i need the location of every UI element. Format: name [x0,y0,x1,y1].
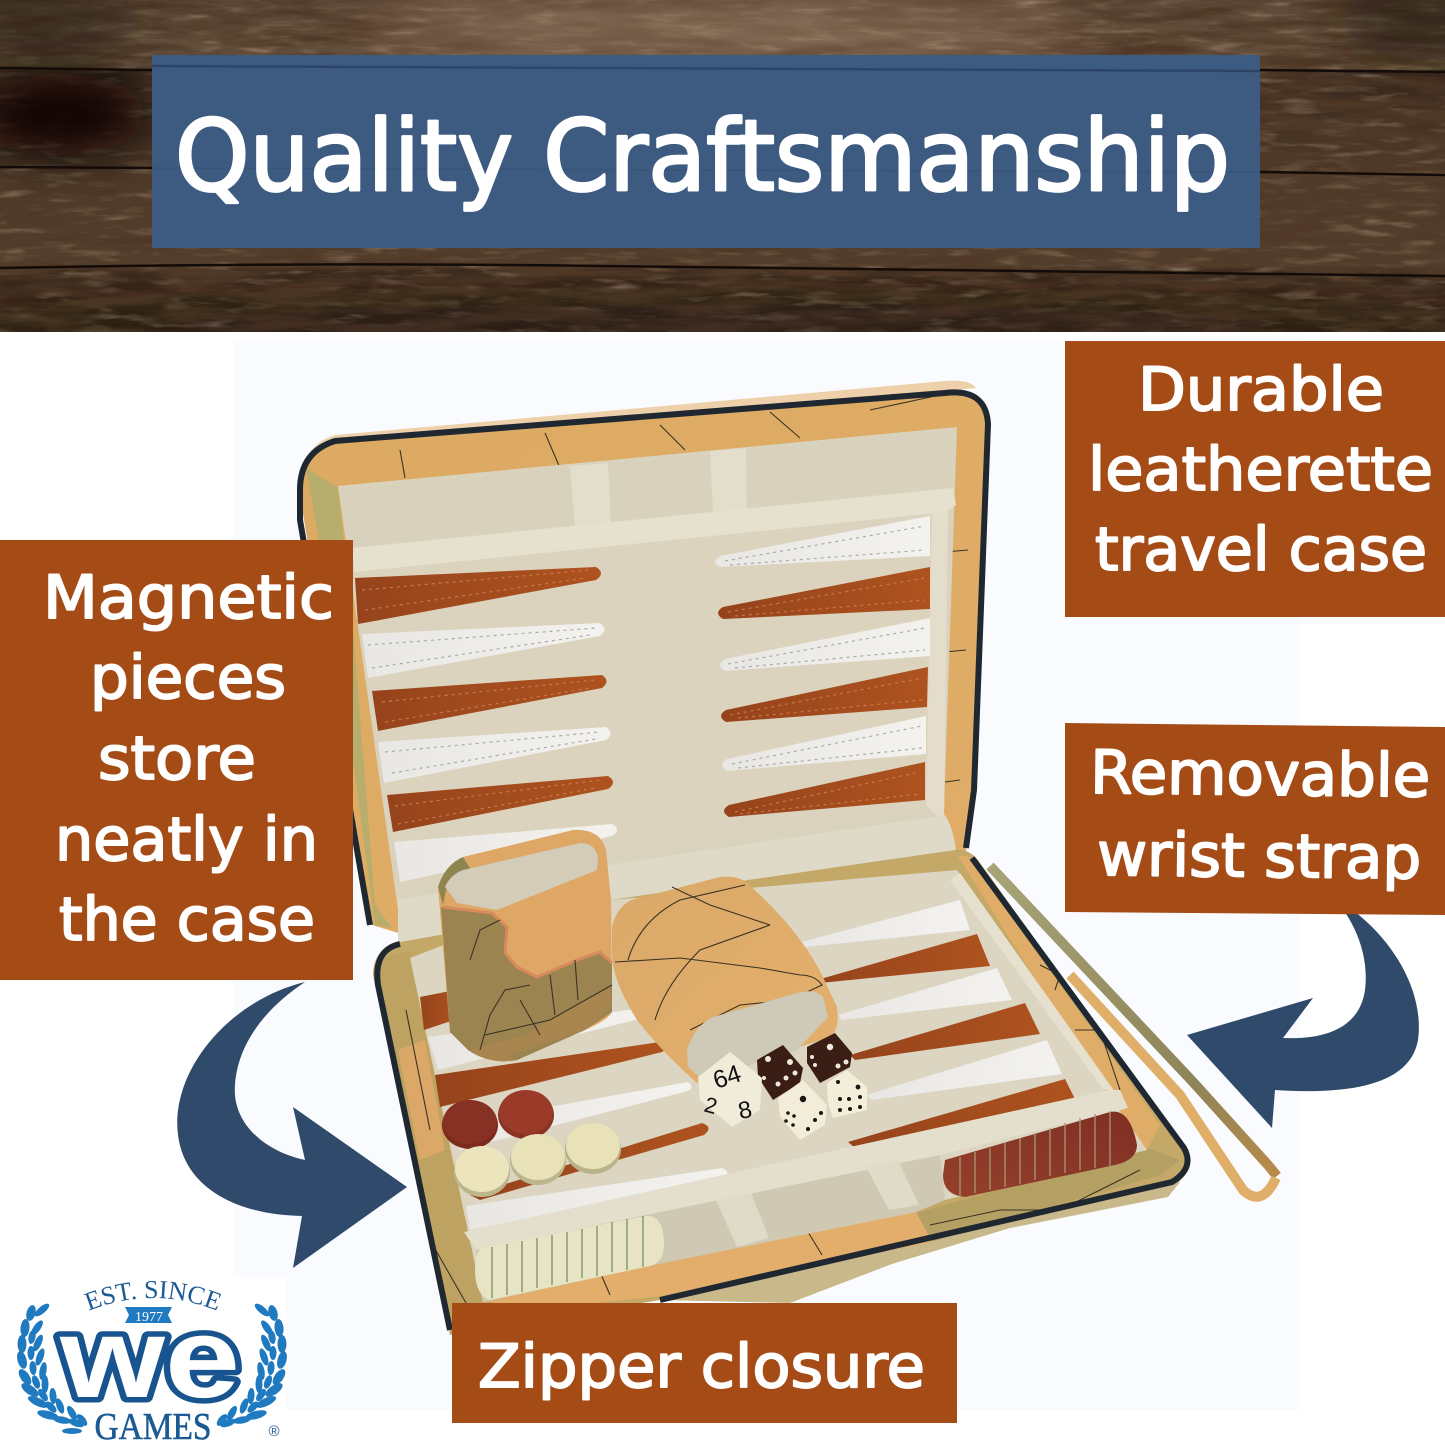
numbered die: 2 [702,1092,720,1119]
loose checkers [442,1090,621,1197]
callout: magnetic pieces: store [98,724,256,794]
dice cup, standing [438,830,612,1061]
standing cup map lines [470,920,612,1050]
strap upper strand [990,866,1277,1176]
callout: magnetic pieces: Magnetic [43,563,334,633]
lid interior wall [338,427,957,938]
board lid [299,381,988,950]
lid tray recess [341,431,953,572]
dark die two [807,1033,852,1083]
numbered die [698,1052,762,1127]
callout: durable case: Durable [1138,355,1384,425]
lying cup opening [687,991,828,1080]
wood banner background [0,0,1445,347]
title text: Quality Craftsmanship [175,100,1230,214]
callout: wrist strap: Removable [1090,738,1431,812]
hinge roll [398,815,965,950]
red checker stack [943,1111,1137,1197]
cream die one [778,1080,827,1140]
bottom tray tabs [716,1160,919,1247]
base zipper [377,858,1188,1330]
standing cup opening [445,843,598,910]
base lower map panel [660,1182,1180,1303]
lid tray tabs [570,448,747,529]
lid top band [305,381,976,462]
callout: wrist strap: wrist strap [1097,820,1422,893]
cream checker stack [475,1216,664,1300]
base right wall [950,873,1115,1092]
standing cup body [438,830,612,1061]
strap lower strand [1070,975,1276,1197]
standing cup map land [441,907,612,1061]
title banner [152,55,1260,248]
callout: zipper closure: Zipper closure [478,1332,925,1402]
callout: durable case [1065,341,1445,617]
left arrow [177,982,407,1268]
lid zipper [300,392,988,925]
cream die two [827,1070,867,1118]
right arrow [1187,897,1419,1128]
callout: durable case: leatherette [1088,435,1433,505]
board base [373,850,1188,1335]
callout: magnetic pieces [0,540,353,980]
base points, right [790,900,1077,1147]
bottom ledge [464,1090,1128,1250]
base bottom orange rim [481,1212,932,1310]
lid tray ledge [352,488,956,574]
logo [17,1280,287,1445]
logo est since: EST. SINCE [84,1280,221,1310]
callout: durable case: travel case [1095,515,1427,585]
photo backdrop [233,340,1300,1410]
lid points, left column [355,567,617,882]
base bottom-right olive rim [916,1148,1180,1242]
lying cup body [612,877,838,1083]
lid right margin [926,510,948,822]
lid outer shell [299,392,988,935]
logo 1977 ribbon [125,1307,172,1325]
callout: magnetic pieces: neatly in [55,805,318,875]
base floor [410,870,1147,1302]
lid points, right column [715,516,930,817]
callout: magnetic pieces: pieces [90,643,286,713]
callout: magnetic pieces: the case [59,885,315,955]
dice cup, lying [612,877,838,1083]
lying cup map lines [615,885,822,1030]
logo registered mark: ® [268,1423,280,1440]
logo left laurel [15,1302,89,1434]
dark die one [757,1045,803,1100]
logo right laurel [215,1302,289,1429]
logo 1977 ribbon: 1977 [135,1310,163,1325]
wrist strap [990,866,1277,1197]
standing cup rim olive [438,857,470,905]
numbered die: 64 [710,1060,745,1095]
base right orange rim [958,856,1160,1150]
base outer shell [373,850,1188,1335]
base points, left [420,990,728,1230]
dice [698,1033,867,1140]
logo we wordmark: we [59,1295,240,1422]
numbered die: 8 [736,1096,754,1125]
cream checkers [454,1123,621,1197]
callout: zipper closure [452,1303,957,1423]
callout: wrist strap [1065,723,1445,915]
bottom tray recess [476,1155,945,1302]
lid map patches [306,468,392,928]
base left map panel [376,950,483,1330]
lid play surface [353,514,932,885]
red checkers [442,1090,554,1149]
